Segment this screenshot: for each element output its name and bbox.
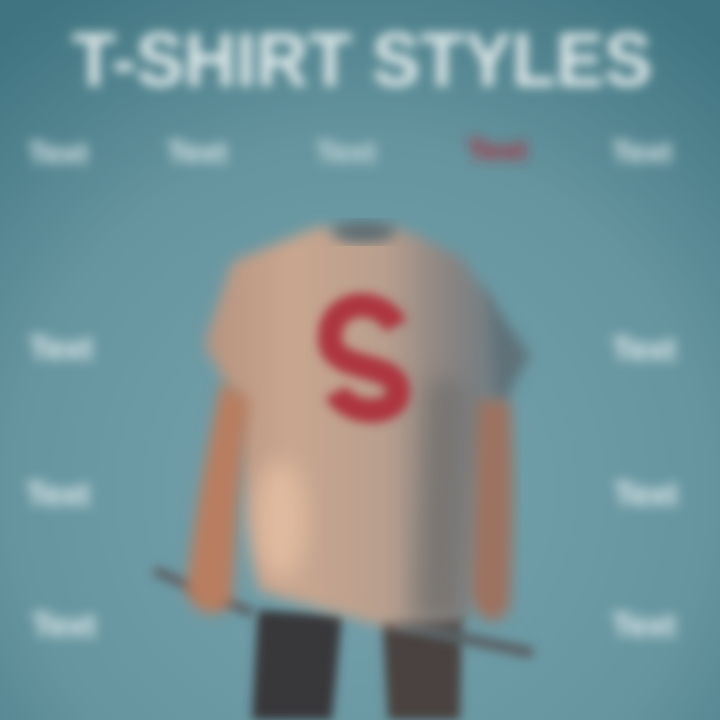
sleeve shadow [470,285,530,410]
top row of style labels [28,134,672,170]
label 2: Text [167,136,227,169]
highlight on shirt [254,460,306,580]
shade on shirt [415,380,465,620]
left label row 3: Text [26,476,90,512]
t-shirt body [204,226,496,626]
left arm [186,380,250,613]
side labels, right column [612,331,678,643]
label 3: Text [316,136,376,169]
red dollar sign [330,305,398,411]
figure wearing t-shirt [158,222,530,720]
legs [252,610,462,720]
right arm [470,400,513,621]
collar [332,222,396,242]
left label row 2: Text [29,330,93,366]
side labels, left column [26,330,96,643]
label 4, red: Text [467,134,527,167]
left label row 4: Text [32,607,96,643]
right label row 2: Text [612,331,676,367]
boards held at the sides [158,572,528,652]
right label row 4: Text [612,607,676,643]
label 1: Text [28,137,88,170]
title: T-SHIRT STYLES [72,18,652,103]
right label row 3: Text [614,476,678,512]
label 5: Text [612,136,672,169]
